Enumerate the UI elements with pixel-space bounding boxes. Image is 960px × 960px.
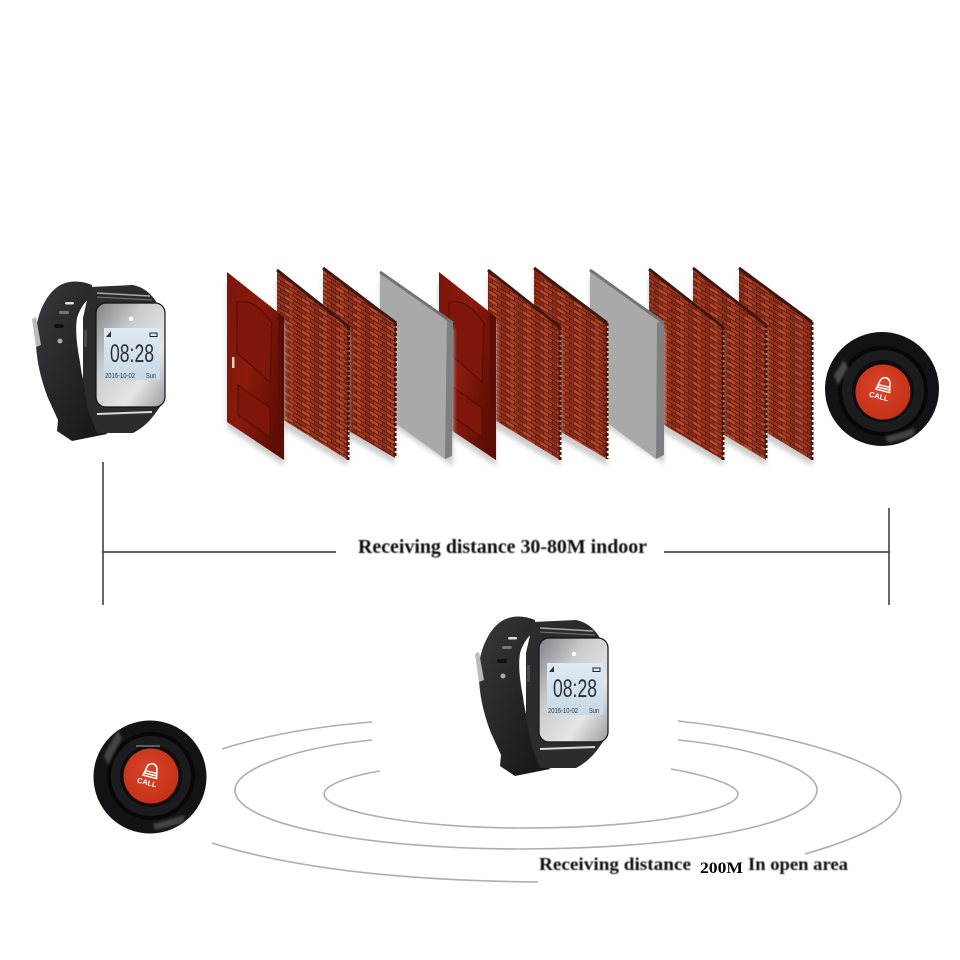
strap holes and buckle xyxy=(475,637,517,682)
date: 2016-10-02 xyxy=(548,708,578,715)
watch face xyxy=(96,303,165,407)
weekday: Sun xyxy=(589,708,599,715)
weekday: Sun xyxy=(146,373,156,380)
body highlights xyxy=(84,293,152,414)
door 2 xyxy=(439,272,496,466)
outer arc, right xyxy=(678,721,901,854)
open area distance label: In open area xyxy=(748,854,848,874)
signal and battery icons xyxy=(549,666,600,672)
button shell xyxy=(94,720,206,834)
call button, bottom left xyxy=(94,720,206,834)
lcd screen xyxy=(547,663,603,715)
bell icon xyxy=(876,376,893,393)
middle arc xyxy=(235,740,817,849)
open area distance label: 200M xyxy=(700,860,743,877)
concrete wall 2 xyxy=(590,270,664,464)
brick wall 10 xyxy=(739,268,812,466)
signal wave arcs xyxy=(212,721,901,882)
call label: CALL xyxy=(868,390,890,403)
concrete wall 1 xyxy=(380,272,453,466)
watch body xyxy=(83,285,165,433)
camera dot xyxy=(572,652,576,656)
watch strap xyxy=(36,282,107,441)
brick wall 4 xyxy=(277,270,349,466)
brick wall 8 xyxy=(649,269,723,466)
dimension line: indoor distance xyxy=(103,462,889,605)
time: 08:28 xyxy=(110,340,154,368)
watch strap xyxy=(479,617,550,776)
door 1 xyxy=(227,272,284,466)
wall row: doors, brick walls and concrete walls xyxy=(227,268,812,466)
inner arc xyxy=(324,769,738,828)
bell icon xyxy=(143,762,160,779)
watch face xyxy=(539,638,608,742)
watch body xyxy=(526,620,608,768)
lcd screen xyxy=(104,328,160,380)
brick wall 6 xyxy=(488,270,560,466)
outer arc, upper left xyxy=(222,722,372,749)
watch receiver, top xyxy=(32,282,165,441)
red button xyxy=(856,364,910,420)
indoor distance label: Receiving distance 30-80M indoor xyxy=(358,536,647,558)
outer arc, lower left xyxy=(212,843,538,882)
button shell highlights xyxy=(104,730,193,830)
watch receiver, bottom xyxy=(475,617,608,776)
camera dot xyxy=(129,317,133,321)
button shell xyxy=(825,332,939,446)
button shell highlights xyxy=(834,342,926,443)
call button, top right xyxy=(825,332,939,446)
signal and battery icons xyxy=(106,331,157,337)
date: 2016-10-02 xyxy=(105,373,135,380)
red button xyxy=(124,748,178,804)
call label: CALL xyxy=(136,776,158,789)
brick wall 7 xyxy=(534,268,607,466)
open area distance label: Receiving distance xyxy=(539,854,691,874)
brick wall 9 xyxy=(693,268,766,466)
body highlights xyxy=(527,628,595,749)
brick wall 5 xyxy=(323,268,396,464)
time: 08:28 xyxy=(553,675,597,703)
strap holes and buckle xyxy=(32,302,74,347)
open area distance label xyxy=(539,854,848,877)
